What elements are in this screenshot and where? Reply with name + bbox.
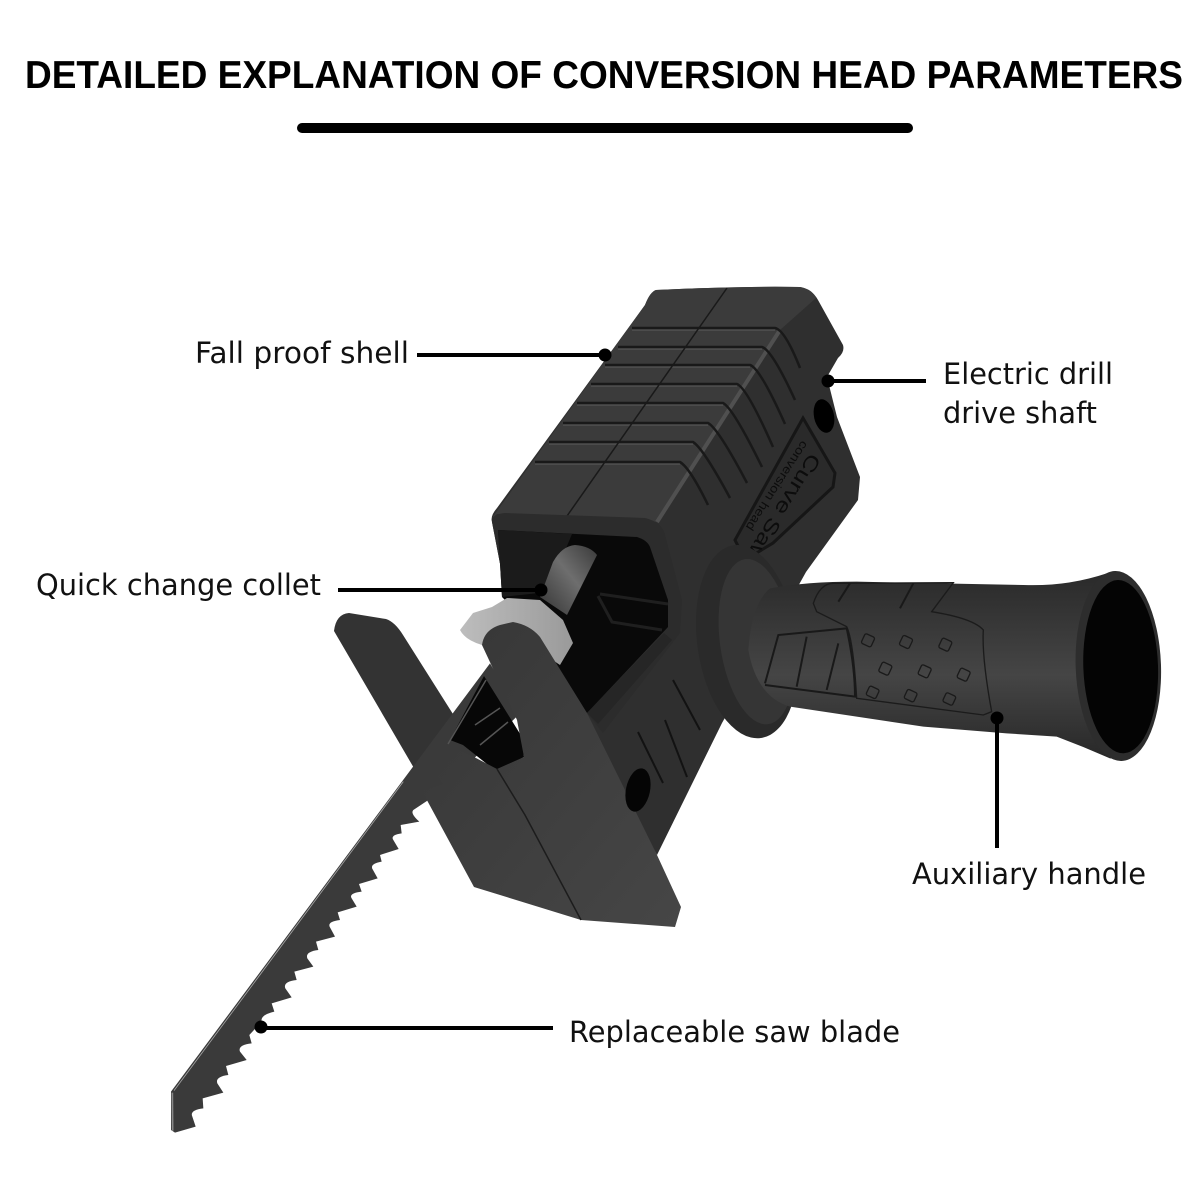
quick change collar (460, 598, 573, 665)
handle flange (684, 538, 810, 745)
saw blade (171, 663, 520, 1133)
shell edge highlight (657, 330, 780, 522)
shell lettering: Curve Saw (739, 449, 824, 568)
handle mouth opening (1080, 579, 1161, 755)
opening left panel (498, 530, 572, 597)
shell silhouette and side face (492, 287, 860, 855)
body ribs (638, 680, 700, 783)
handle mouth rim (1072, 570, 1164, 762)
slot window behind front plate (450, 676, 524, 772)
opening lower strip (587, 633, 672, 724)
illustration: conversion head tool (171, 287, 1164, 1133)
frame opening (498, 530, 668, 713)
shell ridge highlights (535, 330, 775, 464)
front guide plate (422, 622, 681, 927)
label: replaceable saw blade: Replaceable saw blade (569, 1015, 900, 1049)
side label recess (735, 418, 835, 560)
label: quick change collet (36, 568, 548, 602)
handle grip (748, 573, 1120, 758)
label: electric drill drive shaft: drive shaft (943, 396, 1097, 430)
shell top face (492, 287, 816, 522)
label: electric drill drive shaft: Electric drill (943, 357, 1113, 391)
upper mounting hole (811, 397, 837, 435)
label: quick change collet: Quick change collet (36, 568, 321, 602)
shell lettering: conversion head (743, 438, 811, 533)
opening ledge (598, 594, 668, 630)
slot blade teeth (448, 680, 508, 745)
rear guide plate (334, 613, 458, 775)
grip squares (861, 633, 971, 706)
label: fall proof shell: Fall proof shell (195, 336, 409, 370)
grip outline (813, 583, 992, 715)
shell ridges (535, 288, 800, 516)
title underline (297, 123, 913, 133)
label: auxiliary handle: Auxiliary handle (912, 857, 1146, 891)
front frame (492, 513, 682, 733)
collet shaft (540, 545, 597, 615)
label: fall proof shell (195, 336, 612, 370)
grip ribs (765, 583, 913, 697)
plate seam (497, 769, 581, 920)
label: electric drill drive shaft (822, 357, 1113, 430)
lower mounting hole (622, 766, 654, 814)
shell lettering (739, 438, 824, 568)
label: auxiliary handle (912, 712, 1146, 891)
auxiliary handle (684, 538, 1164, 762)
label: replaceable saw blade (254, 1015, 900, 1049)
